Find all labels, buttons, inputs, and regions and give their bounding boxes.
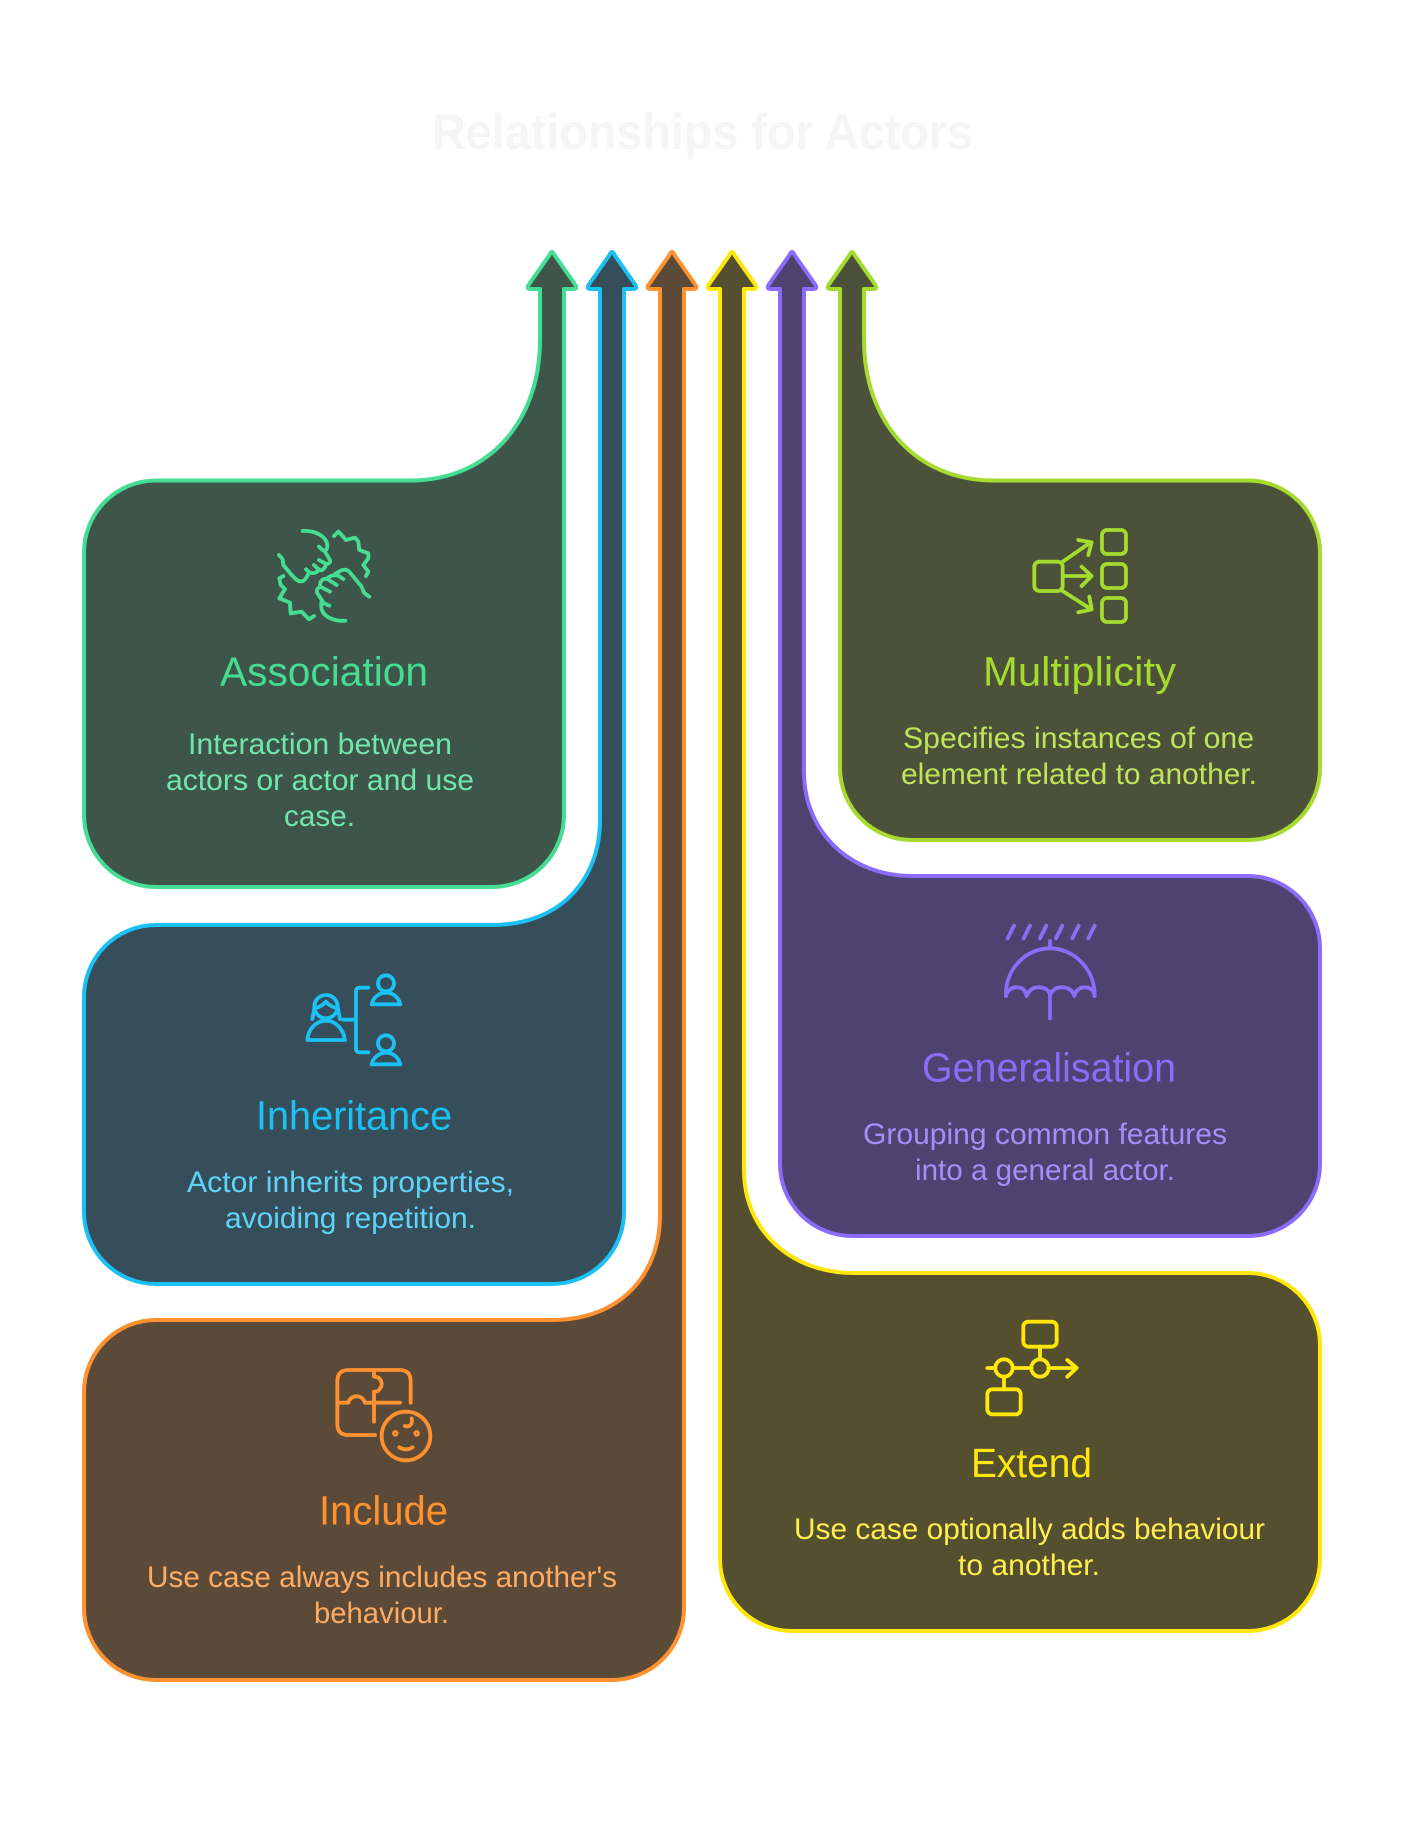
arrow panel shape: include [84,252,696,1680]
title: Relationships for Actors [432,104,973,160]
heading: inheritance: Inheritance [256,1092,452,1138]
description: association: case. [284,800,355,833]
description: inheritance: avoiding repetition. [225,1202,476,1235]
description: inheritance [187,1166,514,1235]
heading: multiplicity: Multiplicity [983,648,1177,694]
description: extend: Use case optionally adds behaviour [794,1513,1265,1546]
heading: association: Association [220,648,428,694]
heading: extend: Extend [971,1440,1092,1486]
heading: generalisation: Generalisation [922,1044,1176,1090]
description: generalisation [863,1118,1227,1187]
description: generalisation: Grouping common features [863,1118,1227,1151]
description: extend: to another. [958,1549,1100,1582]
arrow panel shape: multiplicity [828,252,1320,840]
panel: extend [708,252,1320,1631]
description: include: behaviour. [314,1597,449,1630]
panel: generalisation [768,252,1320,1236]
description: association: actors or actor and use [166,764,474,797]
icon: actor hierarchy [307,975,400,1064]
icon: shaking hands [279,531,369,621]
description: generalisation: into a general actor. [915,1154,1175,1187]
arrow panel shape: association [84,252,576,887]
arrow panel shape: extend [708,252,1320,1631]
description: multiplicity [901,722,1257,791]
icon: puzzle and face [337,1370,430,1460]
description: include [147,1561,617,1630]
description: include: Use case always includes another's [147,1561,617,1594]
panel: include [84,252,696,1680]
description: multiplicity: element related to another. [901,758,1257,791]
icon: flow extension [987,1322,1077,1414]
arrow panel shape: generalisation [768,252,1320,1236]
heading: include: Include [319,1488,448,1534]
description: extend [794,1513,1265,1582]
icon: umbrella in rain [1006,926,1095,1018]
description: association [166,728,474,833]
arrow panel shape: inheritance [84,252,636,1284]
panel: association [84,252,576,887]
panel: inheritance [84,252,636,1284]
description: association: Interaction between [188,728,452,761]
icon: one to many [1034,530,1126,622]
panel: multiplicity [828,252,1320,840]
description: multiplicity: Specifies instances of one [903,722,1254,755]
description: inheritance: Actor inherits properties, [187,1166,514,1199]
